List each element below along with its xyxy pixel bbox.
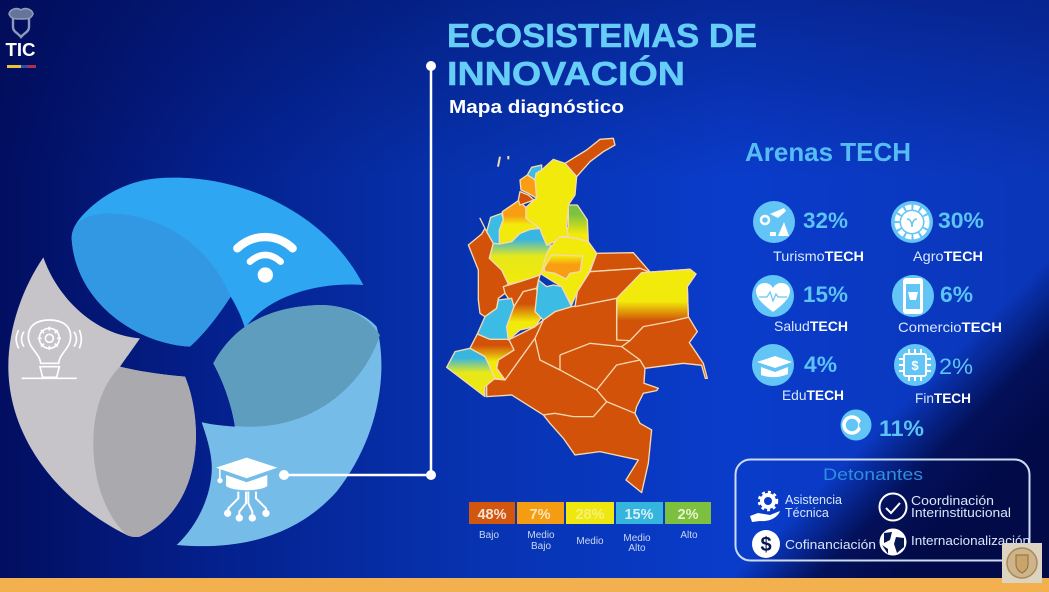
region: Cauca xyxy=(470,334,514,380)
map of Colombia xyxy=(447,138,707,493)
heading: Arenas TECH: Arenas TECH xyxy=(745,137,911,167)
TurismoTECH xyxy=(753,201,864,264)
legend: Medio Alto: Medio xyxy=(623,533,651,544)
legend: Medio: Medio xyxy=(576,536,604,547)
region: Bolívar xyxy=(520,175,537,198)
other 11% xyxy=(840,410,924,441)
region: Urabá xyxy=(487,213,503,244)
legend: Bajo: 48% xyxy=(477,507,507,523)
AgroTECH xyxy=(891,201,984,264)
legend: Medio Alto: Alto xyxy=(628,543,646,554)
ComercioTECH xyxy=(892,275,1002,335)
legend: Alto xyxy=(665,502,711,541)
legend: Medio xyxy=(566,502,614,547)
icon: dollar coin xyxy=(752,530,780,558)
legend: Alto: 2% xyxy=(678,507,699,523)
FinTECH xyxy=(894,344,973,406)
region: low-level departments (south and east) xyxy=(487,269,707,493)
text: Asistencia Técnica: Técnica xyxy=(785,506,829,520)
icon: globe xyxy=(880,528,906,556)
region: Antioquia xyxy=(489,228,552,284)
title: INNOVACIÓN xyxy=(447,55,685,92)
TurismoTECH: TurismoTECH xyxy=(773,248,864,264)
San Andrés islands xyxy=(498,156,508,167)
legend: Bajo xyxy=(469,502,515,541)
legend xyxy=(469,502,711,554)
region: Caldas Risaralda Quindío xyxy=(503,275,540,307)
icon: coat of arms xyxy=(9,9,33,37)
text: Coordinación Interinstitucional: Coordinación xyxy=(911,494,994,508)
EduTECH: EduTECH xyxy=(782,387,844,403)
AgroTECH: AgroTECH xyxy=(913,248,983,264)
SaludTECH: 15% xyxy=(803,282,848,307)
icon: heart with pulse xyxy=(752,275,794,317)
heading: Detonantes: Detonantes xyxy=(823,465,923,484)
region: Sucre xyxy=(518,192,534,205)
legend: Medio: 28% xyxy=(575,507,605,523)
connector line xyxy=(279,61,436,480)
FinTECH: FinTECH xyxy=(915,390,971,406)
bottom bar xyxy=(0,578,1049,592)
icon: phone with cart xyxy=(892,275,934,317)
region: Córdoba xyxy=(499,201,540,244)
text: Internacionalización: Internacionalización xyxy=(911,534,1030,548)
icon: wifi xyxy=(237,237,293,283)
title: ECOSISTEMAS DE xyxy=(447,17,757,54)
FinTECH: 2% xyxy=(939,354,973,379)
SaludTECH xyxy=(752,275,848,334)
text: Coordinación Interinstitucional xyxy=(911,494,1011,520)
region: Cundinamarca xyxy=(544,255,583,279)
EduTECH: 4% xyxy=(804,352,837,377)
legend: Bajo: Bajo xyxy=(479,530,499,541)
region: Santander xyxy=(565,205,588,242)
AgroTECH: 30% xyxy=(938,208,984,233)
region: Nariño xyxy=(447,348,495,397)
region: Valle xyxy=(477,298,514,339)
petal: connectivity xyxy=(72,178,363,347)
icon: light bulb with gear xyxy=(16,320,81,378)
region: Atlántico xyxy=(527,165,542,180)
three-petal diagram xyxy=(8,178,381,546)
SaludTECH: SaludTECH xyxy=(774,318,848,334)
panel: Detonantes xyxy=(736,460,1030,560)
seal xyxy=(1002,543,1042,583)
icon: chip with dollar: $ xyxy=(911,358,919,373)
region: Tolima xyxy=(507,288,541,340)
region: Magdalena Cesar Norte de Santander xyxy=(526,159,577,245)
EduTECH xyxy=(752,344,844,403)
text: Asistencia Técnica: Asistencia xyxy=(785,493,842,507)
region: Huila xyxy=(535,280,572,320)
icon: check circle xyxy=(880,494,906,520)
icon: gear xyxy=(840,410,872,440)
icon: tourism xyxy=(753,201,795,243)
legend: Medio Bajo: 7% xyxy=(530,507,551,523)
text: Cofinanciación: Cofinanciación xyxy=(785,537,876,552)
region: internal borders xyxy=(505,298,645,417)
region: Guajira xyxy=(565,138,615,177)
legend: Medio Alto xyxy=(616,502,663,554)
subtitle: Mapa diagnóstico xyxy=(449,96,624,117)
logo: TIC: TIC xyxy=(6,40,36,60)
text: Asistencia Técnica xyxy=(785,493,842,520)
other 11%: 11% xyxy=(879,416,924,441)
region: Vichada xyxy=(617,269,696,341)
icon: graduation cap with circuit xyxy=(216,458,277,522)
icon: gear in hand xyxy=(750,492,780,522)
legend: Medio Alto: 15% xyxy=(624,507,654,523)
region: Boyacá and Meta xyxy=(540,237,597,305)
icon: dollar coin: $ xyxy=(760,534,772,556)
TurismoTECH: 32% xyxy=(803,208,848,233)
legend: Alto: Alto xyxy=(680,530,698,541)
text: Coordinación Interinstitucional: Interinstitucional xyxy=(911,506,1011,520)
petal: innovation xyxy=(8,257,196,537)
ComercioTECH: Comercio TECH xyxy=(898,319,1002,335)
region: Arauca xyxy=(590,253,651,273)
region: Casanare xyxy=(575,268,651,307)
region: Chocó xyxy=(468,218,508,317)
icon: agro gear xyxy=(891,201,933,243)
legend: Medio Bajo xyxy=(517,502,564,552)
legend: Medio Bajo: Bajo xyxy=(531,541,551,552)
logo: TIC xyxy=(6,9,36,68)
petal: education xyxy=(177,305,381,546)
title xyxy=(447,17,757,92)
legend: Medio Bajo: Medio xyxy=(527,530,555,541)
ComercioTECH: 6% xyxy=(940,282,973,307)
icon: graduation cap xyxy=(752,344,794,386)
colour strip xyxy=(7,65,36,68)
